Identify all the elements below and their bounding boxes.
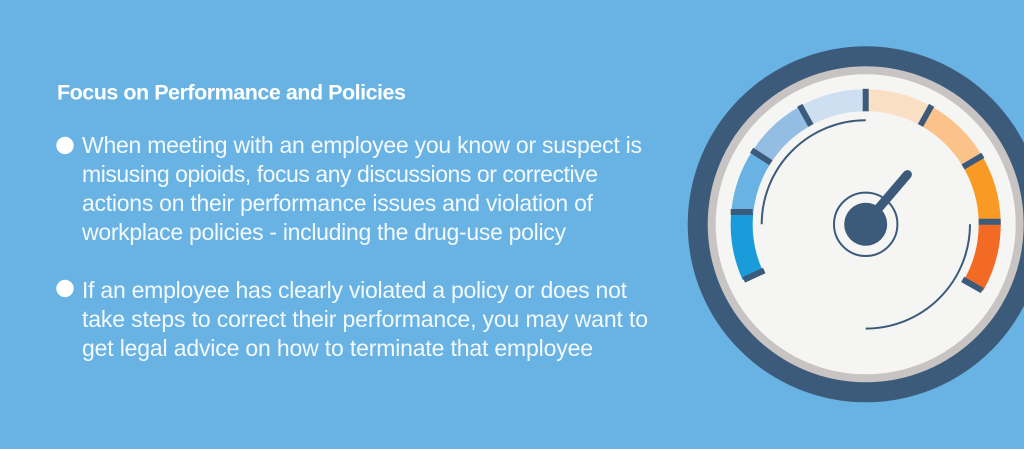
- bullet point: focus on performance: workplace policies - including the drug-use policy: [81, 219, 566, 245]
- bullet point: legal advice: take steps to correct their performance, you may want to: [82, 306, 648, 332]
- bullet point: focus on performance: actions on their performance issues and violation of: [82, 190, 594, 216]
- bullet point: focus on performance: When meeting with an employee you know or suspect is: [82, 132, 642, 158]
- bullet point: focus on performance: misusing opioids, focus any discussions or corrective: [82, 161, 598, 187]
- bullet point: legal advice: get legal advice on how to terminate that employee: [82, 335, 593, 361]
- bullet point: legal advice: If an employee has clearly violated a policy or does not: [82, 277, 628, 303]
- icon: speedometer gauge: [688, 46, 1024, 402]
- gauge tick marks: [731, 89, 1001, 290]
- bullet point: legal advice: [56, 277, 648, 361]
- bullet point: focus on performance: [56, 132, 642, 245]
- needle and hub: [834, 175, 907, 256]
- inner thin arcs: [762, 120, 970, 329]
- gauge colour segments: [742, 100, 990, 286]
- title: Focus on Performance and Policies: [57, 80, 406, 104]
